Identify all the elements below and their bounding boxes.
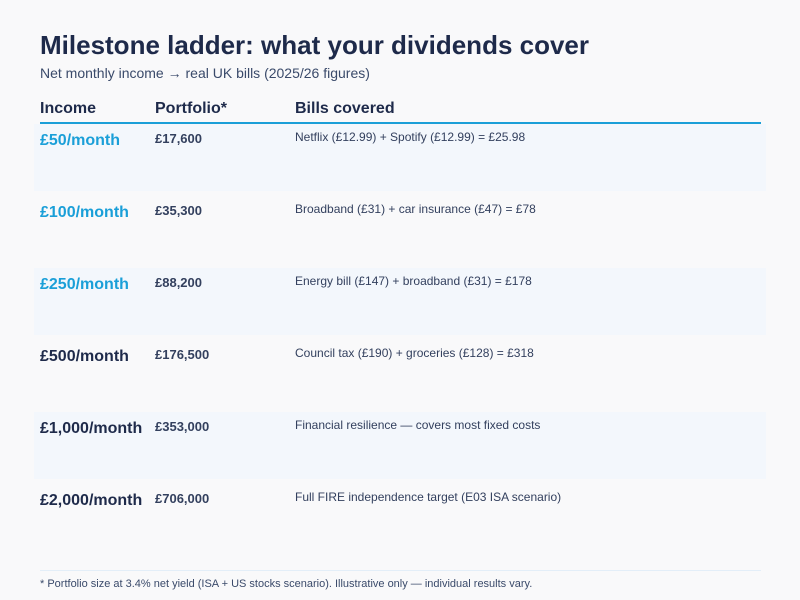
row: £250: £88,200 [155, 275, 202, 290]
row: £2,000: Full FIRE independence target (E03 ISA scenario) [295, 490, 561, 504]
footnote [40, 570, 761, 590]
subtitle: Net monthly income → real UK bills (2025/26 figures) [40, 65, 370, 81]
row: £50 [34, 124, 766, 191]
row: £100: £100/month [40, 204, 129, 221]
row: £500: £500/month [40, 348, 129, 365]
row: £500: Council tax (£190) + groceries (£128) = £318 [295, 346, 534, 360]
table header [40, 98, 761, 124]
table header: Income [40, 100, 96, 117]
row: £100 [40, 202, 536, 221]
row: £1,000 [34, 412, 766, 479]
row: £2,000: £2,000/month [40, 492, 142, 509]
row: £500 [40, 346, 534, 365]
row: £1,000: Financial resilience — covers most fixed costs [295, 418, 540, 432]
title: Milestone ladder: what your dividends cover [40, 30, 589, 60]
footnote: * Portfolio size at 3.4% net yield (ISA + US stocks scenario). Illustrative only — individual results vary. [40, 578, 532, 590]
row: £50: £17,600 [155, 131, 202, 146]
row: £50: Netflix (£12.99) + Spotify (£12.99) = £25.98 [295, 130, 525, 144]
row: £250 [34, 268, 766, 335]
row: £250: Energy bill (£147) + broadband (£31) = £178 [295, 274, 532, 288]
row: £500: £176,500 [155, 347, 209, 362]
row: £1,000: £1,000/month [40, 420, 142, 437]
row: £100: £35,300 [155, 203, 202, 218]
row: £2,000: £706,000 [155, 491, 209, 506]
table header: Bills covered [295, 100, 395, 117]
row: £100: Broadband (£31) + car insurance (£47) = £78 [295, 202, 536, 216]
table header: Portfolio* [155, 100, 227, 117]
row: £1,000: £353,000 [155, 419, 209, 434]
row: £50: £50/month [40, 132, 120, 149]
row: £250: £250/month [40, 276, 129, 293]
row: £2,000 [40, 490, 561, 509]
